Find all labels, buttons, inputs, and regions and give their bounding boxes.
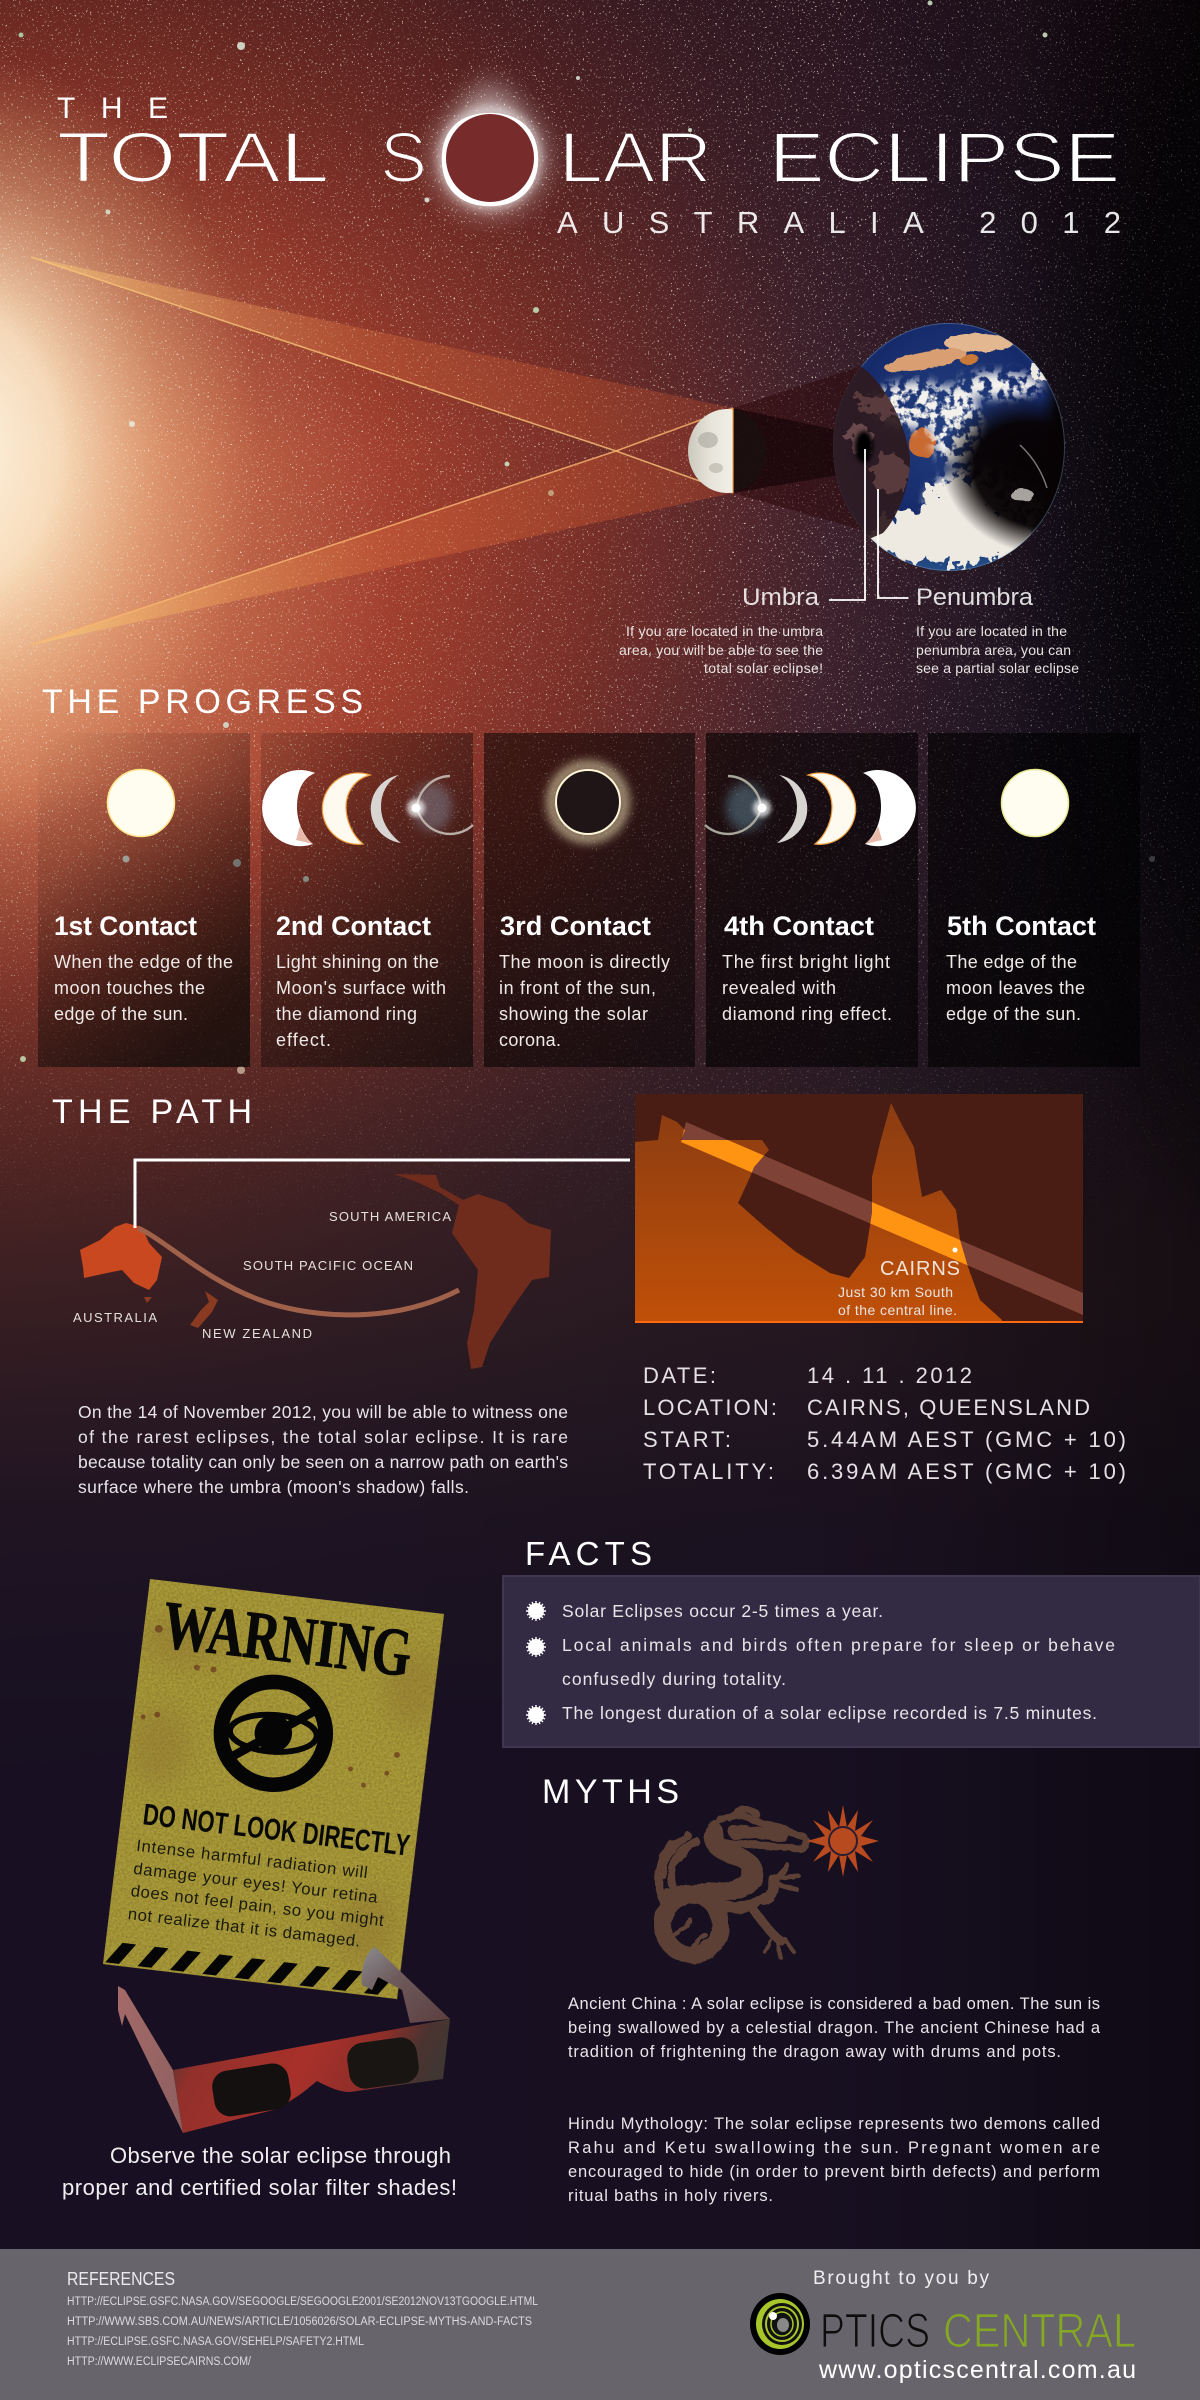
moon half lit: [688, 408, 766, 493]
eclipse details list: 6.39AM AEST (GMC + 10): [807, 1459, 1126, 1484]
panel: 3rd contact: 3rd Contact: [500, 911, 651, 941]
myth: Hindu mythology: Hindu Mythology: The solar eclipse represents two demons called: [568, 2115, 1100, 2133]
umbra label and note: If you are located in the umbra: [626, 623, 823, 639]
panel: 3rd contact: The moon is directly: [499, 952, 670, 972]
umbra label and note: Umbra: [742, 584, 820, 611]
panel: 4th contact: [705, 733, 918, 1067]
moon disc covering the sun: [446, 114, 534, 202]
panel: 2nd contact: 2nd Contact: [276, 911, 431, 941]
references: HTTP://WWW.SBS.COM.AU/NEWS/ARTICLE/1056026/SOLAR-ECLIPSE-MYTHS-AND-FACTS: [67, 2316, 532, 2328]
panel: 4th contact: revealed with: [722, 978, 836, 998]
penumbra label and note: penumbra area, you can: [916, 642, 1071, 658]
panel: 5th contact: 5th Contact: [947, 911, 1096, 941]
icon: total eclipse corona: [552, 766, 624, 838]
icon: crescent phases: [262, 770, 473, 846]
panel: facts: confusedly during totality.: [562, 1669, 786, 1689]
icon: crescent phases mirrored: [705, 770, 916, 846]
panel: 1st contact: moon touches the: [54, 978, 205, 998]
inset map: Cairns: of the central line.: [838, 1302, 957, 1318]
penumbra label and note: see a partial solar eclipse: [916, 660, 1079, 676]
footer: [0, 2249, 1200, 2400]
eclipse details list: CAIRNS, QUEENSLAND: [807, 1395, 1090, 1420]
path description: of the rarest eclipses, the total solar eclipse. It is rare: [78, 1427, 568, 1447]
penumbra label and note: If you are located in the: [916, 623, 1067, 639]
warning message: [127, 1836, 391, 1953]
title: ECLIPSE: [769, 119, 1120, 198]
references: HTTP://ECLIPSE.GSFC.NASA.GOV/SEHELP/SAFETY2.HTML: [67, 2336, 365, 2348]
world map: Australia to South America: NEW ZEALAND: [202, 1326, 312, 1341]
logo wordmark: PTICS: [820, 2305, 930, 2358]
panel: 1st contact: When the edge of the: [54, 952, 233, 972]
panel: facts: Local animals and birds often prepare for sleep or behave: [562, 1635, 1115, 1655]
icon: sun last contact: [1002, 770, 1068, 836]
path description: surface where the umbra (moon's shadow) falls.: [78, 1477, 469, 1497]
panel: 1st contact: [38, 733, 250, 1067]
myth: Hindu mythology: encouraged to hide (in order to prevent birth defects) and perform: [568, 2163, 1100, 2181]
logo wordmark: CENTRAL: [943, 2305, 1136, 2358]
icon: sun first contact: [108, 770, 174, 836]
panel: 5th contact: moon leaves the: [946, 978, 1085, 998]
icon: optics central lens: [750, 2293, 810, 2355]
references: REFERENCES: [67, 2269, 175, 2289]
references: [67, 2269, 539, 2368]
title: [57, 86, 1121, 240]
title: LAR: [559, 119, 712, 198]
heading: the progress: THE PROGRESS: [42, 683, 363, 721]
panel: facts: The longest duration of a solar eclipse recorded is 7.5 minutes.: [562, 1703, 1097, 1723]
icon: red sun: [807, 1805, 879, 1877]
warning message: does not feel pain, so you might: [130, 1881, 385, 1930]
earth globe: [833, 323, 1065, 571]
inset map: Cairns: [635, 1094, 1083, 1323]
warning message: damage your eyes! Your retina: [132, 1859, 379, 1907]
panel: 3rd contact: showing the solar: [499, 1004, 648, 1024]
panel: 1st contact: edge of the sun.: [54, 1004, 188, 1024]
panel: facts: Solar Eclipses occur 2-5 times a year.: [562, 1601, 883, 1621]
title: S: [380, 119, 427, 198]
references: HTTP://ECLIPSE.GSFC.NASA.GOV/SEGOOGLE/SEGOOGLE2001/SE2012NOV13TGOOGLE.HTML: [67, 2296, 539, 2308]
eclipse details list: 14 . 11 . 2012: [807, 1363, 972, 1388]
eclipse details list: [643, 1363, 1126, 1484]
umbra label and note: total solar eclipse!: [704, 660, 823, 676]
eclipse details list: TOTALITY:: [643, 1459, 774, 1484]
path description: [78, 1402, 568, 1497]
world map: Australia to South America: SOUTH AMERICA: [329, 1209, 451, 1224]
hazard stripes: [105, 1941, 395, 1997]
penumbra label and note: Penumbra: [916, 584, 1034, 611]
Tasmania: [144, 1297, 152, 1303]
shadow cones from moon to earth: [733, 360, 880, 535]
inset map: Cairns: Just 30 km South: [838, 1284, 953, 1300]
warning message: not realize that it is damaged.: [127, 1904, 361, 1951]
panel: facts: [503, 1576, 1200, 1747]
panel: 2nd contact: effect.: [276, 1030, 331, 1050]
heading: myths: MYTHS: [542, 1773, 679, 1811]
warning heading: WARNING: [159, 1587, 416, 1691]
penumbra label and note: [916, 584, 1079, 676]
panel: 2nd contact: [261, 733, 473, 1067]
icon: dragon: [659, 1810, 808, 1957]
panel: 2nd contact: Moon's surface with: [276, 978, 446, 998]
New Zealand: [190, 1291, 218, 1328]
path of totality: [138, 1228, 459, 1315]
South America: [394, 1174, 551, 1369]
sun rays converging on the moon: [31, 257, 733, 645]
world map: Australia to South America: AUSTRALIA: [73, 1310, 157, 1325]
inset map: Cairns: CAIRNS: [880, 1258, 960, 1280]
connector line from Australia to inset map: [135, 1160, 630, 1228]
sponsor line: Brought to you by: [813, 2268, 990, 2289]
panel: 3rd contact: [484, 733, 695, 1067]
umbra label and note: area, you will be able to see the: [619, 642, 823, 658]
panel: 4th contact: 4th Contact: [724, 911, 874, 941]
panel: 5th contact: edge of the sun.: [946, 1004, 1081, 1024]
myth: ancient China: [568, 1995, 1101, 2061]
panel: 2nd contact: Light shining on the: [276, 952, 439, 972]
myth: Hindu mythology: Rahu and Ketu swallowing the sun. Pregnant women are: [568, 2139, 1100, 2157]
icon: bullet star: [526, 1601, 546, 1725]
glasses caption: Observe the solar eclipse through: [110, 2143, 451, 2168]
world map: Australia to South America: [73, 1174, 551, 1369]
earth shadow crescent: [833, 366, 910, 538]
eclipse details list: DATE:: [643, 1363, 716, 1388]
panel: 4th contact: The first bright light: [722, 952, 890, 972]
eclipse details list: START:: [643, 1427, 731, 1452]
panel: 3rd contact: corona.: [499, 1030, 561, 1050]
umbra label and note: [619, 584, 823, 676]
myth: Hindu mythology: ritual baths in holy rivers.: [568, 2187, 773, 2205]
panel: 3rd contact: in front of the sun,: [499, 978, 656, 998]
penumbra pointer line: [878, 489, 908, 598]
path description: On the 14 of November 2012, you will be able to witness one: [78, 1402, 568, 1422]
corona eclipse ring: [440, 80, 540, 208]
umbra pointer line: [829, 449, 865, 600]
eclipse details list: 5.44AM AEST (GMC + 10): [807, 1427, 1126, 1452]
title: THE: [57, 92, 168, 125]
myth: ancient China: being swallowed by a celestial dragon. The ancient Chinese had a: [568, 2019, 1101, 2037]
title: AUSTRALIA 2012: [557, 205, 1121, 240]
path band: [681, 1122, 1083, 1315]
icon: no eye: [215, 1676, 332, 1791]
eclipse details list: LOCATION:: [643, 1395, 777, 1420]
website: www.opticscentral.com.au: [818, 2356, 1136, 2384]
title: O: [435, 86, 545, 233]
heading: the path: THE PATH: [52, 1093, 252, 1131]
references: HTTP://WWW.ECLIPSECAIRNS.COM/: [67, 2356, 252, 2368]
glasses caption: [62, 2143, 457, 2200]
world map: Australia to South America: SOUTH PACIFIC OCEAN: [243, 1258, 413, 1273]
glasses caption: proper and certified solar filter shades!: [62, 2175, 457, 2200]
myth: ancient China: Ancient China : A solar eclipse is considered a bad omen. The sun is: [568, 1995, 1100, 2013]
panel: 4th contact: diamond ring effect.: [722, 1004, 892, 1024]
title: TOTAL: [57, 119, 329, 198]
warning subheading: DO NOT LOOK DIRECTLY: [141, 1799, 412, 1863]
panel: 1st contact: 1st Contact: [54, 911, 197, 941]
panel: 5th contact: [928, 733, 1140, 1067]
warning poster: [103, 1579, 454, 2000]
panel: 2nd contact: the diamond ring: [276, 1004, 417, 1024]
myth: Hindu mythology: [568, 2115, 1100, 2205]
heading: facts: FACTS: [525, 1535, 652, 1572]
eclipse glasses: [118, 1947, 450, 2133]
Australia: [80, 1223, 162, 1290]
myth: ancient China: tradition of frightening the dragon away with drums and pots.: [568, 2043, 1061, 2061]
path description: because totality can only be seen on a narrow path on earth's: [78, 1452, 568, 1472]
warning message: Intense harmful radiation will: [135, 1836, 369, 1882]
logo wordmark: [820, 2305, 1136, 2358]
panel: 5th contact: The edge of the: [946, 952, 1077, 972]
